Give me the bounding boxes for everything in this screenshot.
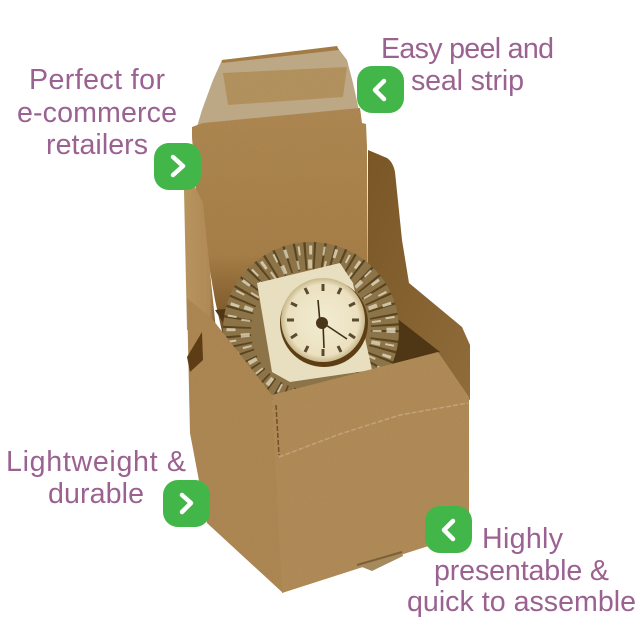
back panel with top flap	[192, 108, 367, 345]
roman numeral ticks	[287, 284, 359, 356]
label: easy peel and seal strip: seal strip	[411, 65, 524, 97]
clock face	[281, 278, 365, 362]
label: highly presentable and quick to assemble: presentable &	[434, 555, 609, 587]
corner crease	[276, 405, 279, 455]
box interior shadow	[215, 295, 440, 398]
label: lightweight and durable: Lightweight &	[6, 446, 186, 478]
front fold crease	[279, 403, 468, 457]
front face of box	[272, 352, 469, 593]
crystal highlights	[231, 250, 391, 410]
crystal radial ribs	[237, 256, 385, 404]
left side wing	[184, 187, 216, 330]
label: perfect for e-commerce retailers: Perfect for	[29, 64, 165, 96]
label: lightweight and durable	[6, 446, 186, 510]
clock hands	[318, 300, 347, 348]
square clock block	[257, 263, 372, 382]
bottom tab	[357, 552, 403, 571]
label: perfect for e-commerce retailers: retailers	[46, 129, 148, 161]
left face of box	[187, 298, 283, 593]
crystal base	[223, 242, 399, 418]
label: perfect for e-commerce retailers	[17, 64, 177, 161]
clock centre	[316, 317, 328, 329]
button: right chevron, lightweight	[163, 480, 210, 527]
peel and seal strip	[196, 46, 360, 130]
label: easy peel and seal strip: Easy peel and	[381, 33, 554, 65]
button: left chevron, presentable	[425, 506, 472, 553]
crystal clock	[223, 242, 399, 418]
crystal inner highlights	[245, 264, 377, 396]
right side flap	[367, 150, 470, 400]
label: easy peel and seal strip	[381, 33, 554, 97]
label: lightweight and durable: durable	[48, 478, 144, 510]
label: highly presentable and quick to assemble: quick to assemble	[407, 586, 636, 618]
button: right chevron, e-commerce	[154, 143, 201, 190]
clock rim	[280, 279, 368, 367]
cardboard box with clock	[184, 46, 470, 593]
left side tear	[187, 332, 203, 372]
label: perfect for e-commerce retailers: e-commerce	[17, 97, 177, 129]
label: highly presentable and quick to assemble	[407, 523, 636, 618]
label: highly presentable and quick to assemble: Highly	[482, 523, 564, 555]
button: left chevron, seal strip	[357, 66, 404, 113]
